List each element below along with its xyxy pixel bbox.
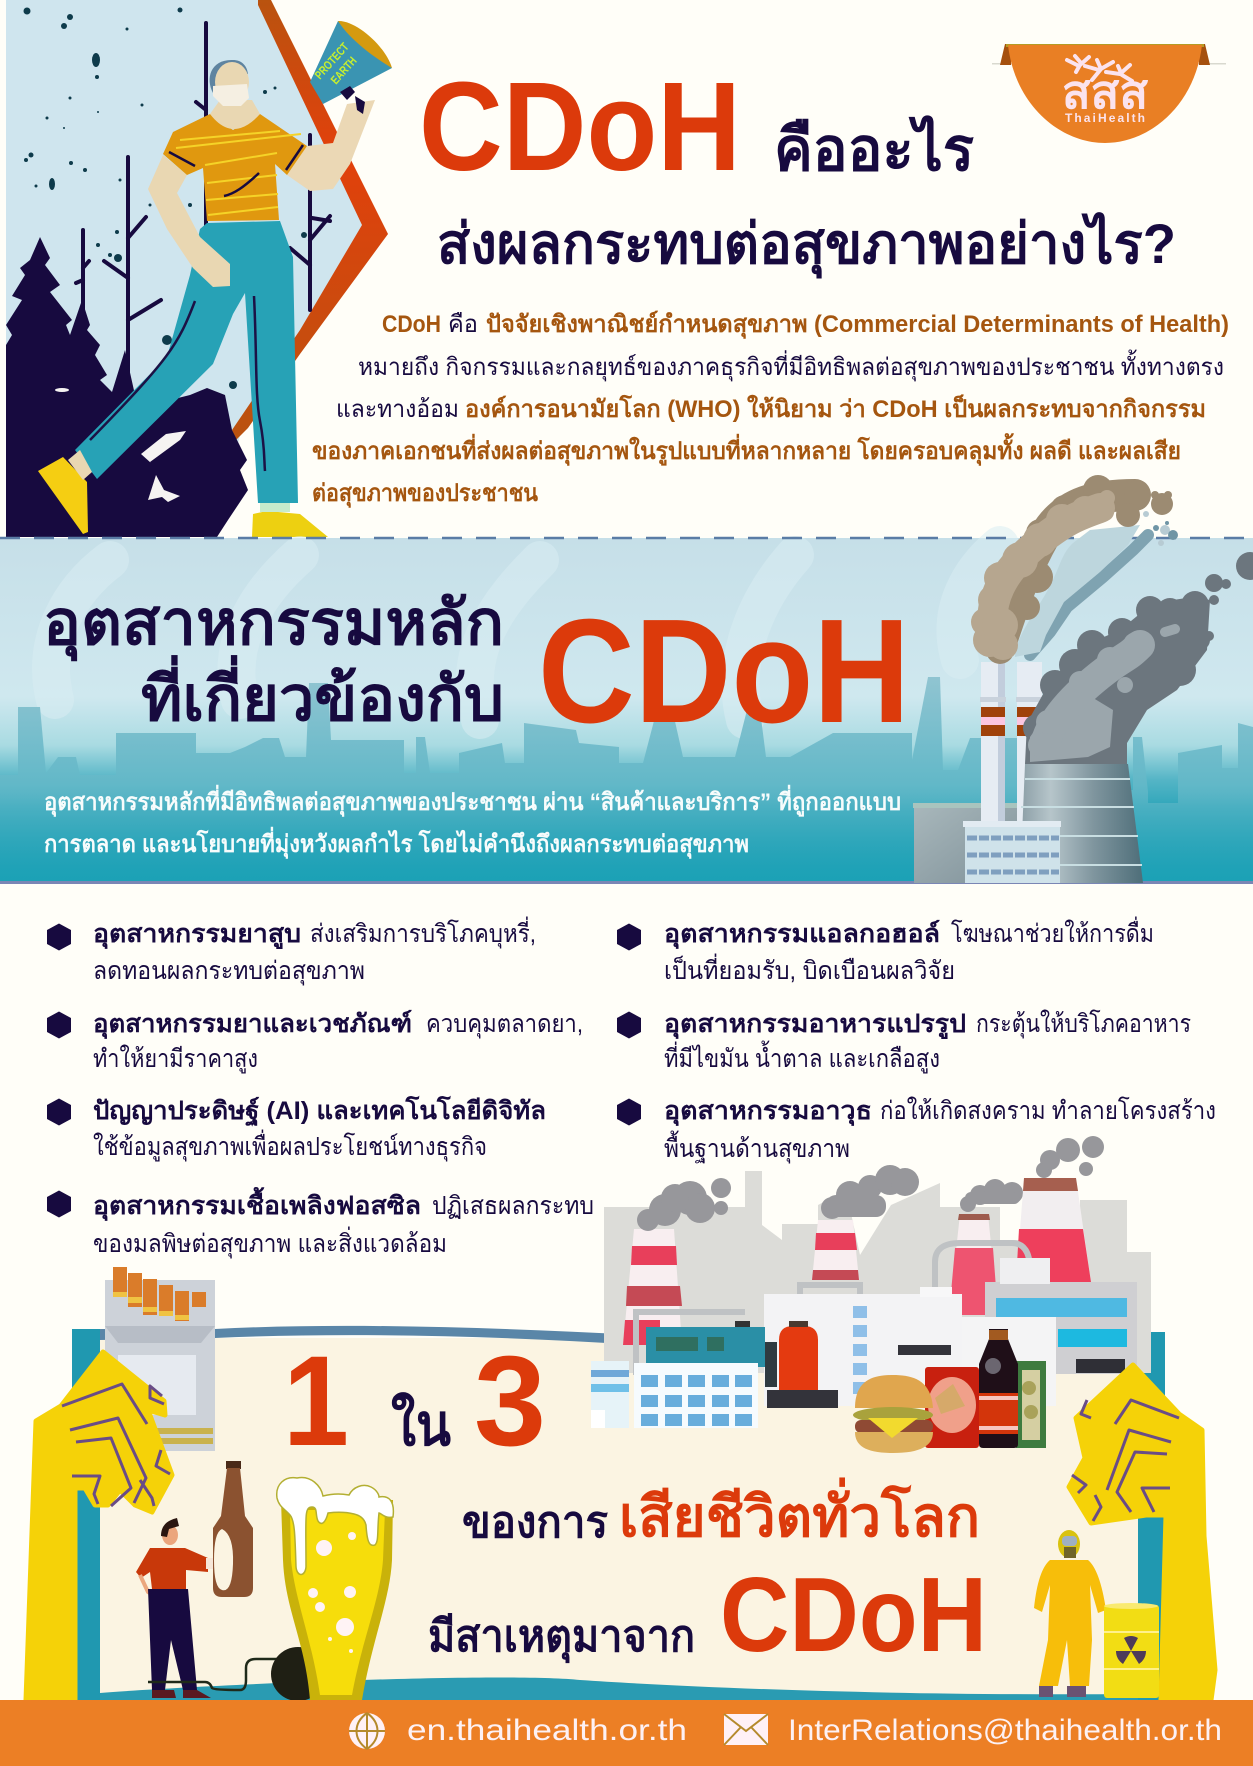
shoes xyxy=(152,1690,211,1698)
list item: weapons: ก่อให้เกิดสงคราม ทำลายโครงสร้าง xyxy=(880,1096,1216,1125)
logo: ThaiHealth: ThaiHealth xyxy=(1065,111,1145,125)
title: คืออะไร xyxy=(774,114,974,183)
text block: CDoH definition: คือ xyxy=(448,311,478,338)
big stat: 1 in 3 xyxy=(283,1330,546,1473)
icon: yellow hand left xyxy=(26,1352,172,1700)
title: CDoH xyxy=(419,56,741,197)
list item: alcohol: เป็นที่ยอมรับ, บิดเบือนผลวิจัย xyxy=(664,953,955,985)
heading: อุตสาหกรรมหลัก xyxy=(43,589,504,661)
megaphone xyxy=(310,21,392,104)
smokestack B xyxy=(812,1165,919,1280)
text block: CDoH definition: CDoH xyxy=(382,311,441,338)
icon: cigarette pack xyxy=(105,1267,215,1451)
list item: fossil fuel: ปฏิเสธผลกระทบ xyxy=(432,1192,594,1220)
cookie pack xyxy=(1016,1361,1046,1448)
icon: envelope xyxy=(724,1714,768,1745)
ankle xyxy=(68,450,92,480)
text block: CDoH definition: ปัจจัยเชิงพาณิชย์กำหนดสุขภาพ (Commercial Determinants of Health) xyxy=(486,310,1229,340)
big stat: 1 in 3: 3 xyxy=(474,1330,546,1473)
title xyxy=(419,56,1176,279)
white leaves xyxy=(55,388,186,502)
band description: การตลาด และนโยบายที่มุ่งหวังผลกำไร โดยไม่คำนึงถึงผลกระทบต่อสุขภาพ xyxy=(44,826,749,860)
icon: food and drink xyxy=(853,1329,1046,1453)
stat text: CDoH xyxy=(720,1556,987,1674)
email: InterRelations@thaihealth.or.th xyxy=(788,1714,1222,1747)
arm xyxy=(140,1575,158,1598)
list item: processed food: ที่มีไขมัน น้ำตาล และเกลือสูง xyxy=(664,1040,940,1074)
list item: alcohol: โฆษณาช่วยให้การดื่ม xyxy=(951,916,1154,948)
right building xyxy=(985,1258,1137,1374)
sky background xyxy=(6,0,388,537)
list item: AI xyxy=(47,1095,546,1162)
big CDoH: CDoH xyxy=(538,589,910,754)
icon: hazmat worker xyxy=(1034,1530,1106,1697)
icon: radioactive barrel xyxy=(1104,1603,1159,1698)
stat text: มีสาเหตุมาจาก xyxy=(428,1612,695,1664)
list item: processed food xyxy=(617,1009,1191,1074)
big stat: 1 in 3: 1 xyxy=(283,1330,349,1473)
heading xyxy=(43,589,504,734)
list item: processed food: อุตสาหกรรมอาหารแปรรูป xyxy=(664,1010,966,1040)
city skyline xyxy=(0,677,1253,880)
pine trees xyxy=(6,237,248,537)
hair xyxy=(210,60,248,93)
bottom wave xyxy=(100,1677,1138,1700)
chain and ball xyxy=(148,1659,285,1690)
stat text: เสียชีวิตทั่วโลก xyxy=(619,1477,980,1548)
heading: ที่เกี่ยวข้องกับ xyxy=(141,655,504,734)
band description xyxy=(44,784,901,860)
illustration: city and factories xyxy=(591,1136,1151,1428)
ink splatter xyxy=(24,8,307,389)
list item: pharma: ควบคุมตลาดยา, xyxy=(426,1010,583,1039)
list item: tobacco xyxy=(47,916,536,986)
logo: ThaiHealth: สสส xyxy=(1062,66,1149,118)
list item: processed food: กระตุ้นให้บริโภคอาหาร xyxy=(976,1009,1191,1039)
grey skyline xyxy=(604,1171,1151,1373)
neck xyxy=(210,100,260,129)
dark smoke xyxy=(1023,552,1253,764)
text block: CDoH definition: ของภาคเอกชนที่ส่งผลต่อสุขภาพในรูปแบบที่หลากหลาย โดยครอบคลุมทั้ง ผลดี และผลเสีย xyxy=(312,432,1181,467)
text block: CDoH definition: และทางอ้อม xyxy=(336,396,459,423)
left band xyxy=(72,1329,100,1700)
arm left xyxy=(148,155,230,287)
chips bag xyxy=(925,1367,979,1448)
megaphone: EARTH xyxy=(328,54,360,87)
logo: ThaiHealth xyxy=(992,44,1226,143)
head xyxy=(215,62,249,102)
front building xyxy=(963,821,1061,883)
list item: pharma: ทำให้ยามีราคาสูง xyxy=(93,1044,258,1074)
panel: bottom frame xyxy=(72,1326,1165,1700)
cooling tower xyxy=(1020,764,1143,883)
list item: AI: ปัญญาประดิษฐ์ (AI) และเทคโนโลยีดิจิทัล xyxy=(93,1095,546,1127)
soda bottle xyxy=(979,1329,1018,1448)
title: ส่งผลกระทบต่อสุขภาพอย่างไร? xyxy=(437,211,1176,279)
footer bar xyxy=(0,1700,1253,1766)
list item: weapons: อุตสาหกรรมอาวุธ xyxy=(664,1097,872,1127)
list item: weapons xyxy=(617,1096,1216,1164)
list item: alcohol xyxy=(617,916,1154,985)
teal building xyxy=(646,1321,777,1387)
white block with windows xyxy=(591,1361,758,1428)
list item: tobacco: ส่งเสริมการบริโภคบุหรี่, xyxy=(310,916,536,949)
list item: pharma: อุตสาหกรรมยาและเวชภัณฑ์ xyxy=(93,1009,412,1040)
icon: man with ball and chain xyxy=(136,1518,325,1701)
right band xyxy=(1138,1332,1165,1700)
faint smoke xyxy=(51,545,1000,720)
chimneys xyxy=(980,662,1042,822)
red tank xyxy=(767,1321,838,1408)
icon: bottle xyxy=(213,1461,253,1597)
rear building xyxy=(914,803,1024,883)
window strip xyxy=(853,1306,867,1394)
list item: weapons: พื้นฐานด้านสุขภาพ xyxy=(664,1130,850,1164)
smokestack A xyxy=(623,1178,731,1345)
trousers xyxy=(148,1589,197,1690)
dashed divider xyxy=(0,537,1253,539)
smokestack D xyxy=(1016,1136,1104,1282)
burger xyxy=(853,1375,933,1453)
text block: CDoH definition xyxy=(312,310,1229,509)
list item: fossil fuel: ของมลพิษต่อสุขภาพ และสิ่งแวดล้อม xyxy=(93,1226,447,1259)
list item: tobacco: อุตสาหกรรมยาสูบ xyxy=(93,920,301,950)
text block: CDoH definition: ต่อสุขภาพของประชาชน xyxy=(312,480,539,509)
arm right xyxy=(287,100,375,191)
panel: hero illustration xyxy=(6,0,392,537)
list item: alcohol: อุตสาหกรรมแอลกอฮอล์ xyxy=(664,919,940,950)
top wave xyxy=(72,1326,1138,1345)
white factory xyxy=(764,1294,962,1406)
illustration: power plant xyxy=(913,475,1253,883)
bare trees xyxy=(76,23,330,390)
stat text xyxy=(428,1477,987,1674)
panel: main industries band xyxy=(0,538,1253,884)
far shoe xyxy=(38,457,88,534)
hand gripping xyxy=(340,86,365,114)
list item: tobacco: ลดทอนผลกระทบต่อสุขภาพ xyxy=(93,957,365,986)
shirt xyxy=(163,114,307,221)
mask xyxy=(213,84,249,106)
smokestack C xyxy=(949,1179,1023,1315)
list: industries xyxy=(47,916,1216,1259)
icon: beer glass xyxy=(277,1477,393,1700)
zigzag red line xyxy=(232,0,388,440)
pipes xyxy=(636,1243,1030,1375)
pants xyxy=(75,221,298,503)
list item: fossil fuel: อุตสาหกรรมเชื้อเพลิงฟอสซิล xyxy=(93,1186,421,1222)
list item: pharma xyxy=(47,1009,583,1074)
dark sign xyxy=(898,1345,951,1355)
man figure xyxy=(38,21,392,537)
icon: globe xyxy=(349,1713,385,1749)
list item: AI: ใช้ข้อมูลสุขภาพเพื่อผลประโยชน์ทางธุรกิจ xyxy=(93,1129,487,1162)
head and hair xyxy=(162,1525,178,1545)
pale smoke xyxy=(1015,511,1178,657)
icon: yellow hand right xyxy=(1069,1365,1215,1700)
big stat: 1 in 3: ใน xyxy=(391,1391,451,1458)
stat text: ของการ xyxy=(462,1498,608,1547)
text block: CDoH definition: องค์การอนามัยโลก (WHO) ให้นิยาม ว่า CDoH เป็นผลกระทบจากกิจกรรม xyxy=(465,394,1206,423)
text block: CDoH definition: หมายถึง กิจกรรมและกลยุทธ์ของภาคธุรกิจที่มีอิทธิพลต่อสุขภาพของประชาชน ทั้งทางตรง xyxy=(358,349,1224,382)
website: en.thaihealth.or.th xyxy=(407,1714,687,1747)
shirt xyxy=(136,1548,208,1589)
band background xyxy=(0,538,1253,883)
list item: fossil fuel xyxy=(47,1186,594,1259)
band description: อุตสาหกรรมหลักที่มีอิทธิพลต่อสุขภาพของประชาชน ผ่าน “สินค้าและบริการ” ที่ถูกออกแบบ xyxy=(44,784,901,818)
brown smoke xyxy=(971,475,1173,664)
megaphone: PROTECT xyxy=(312,40,352,82)
